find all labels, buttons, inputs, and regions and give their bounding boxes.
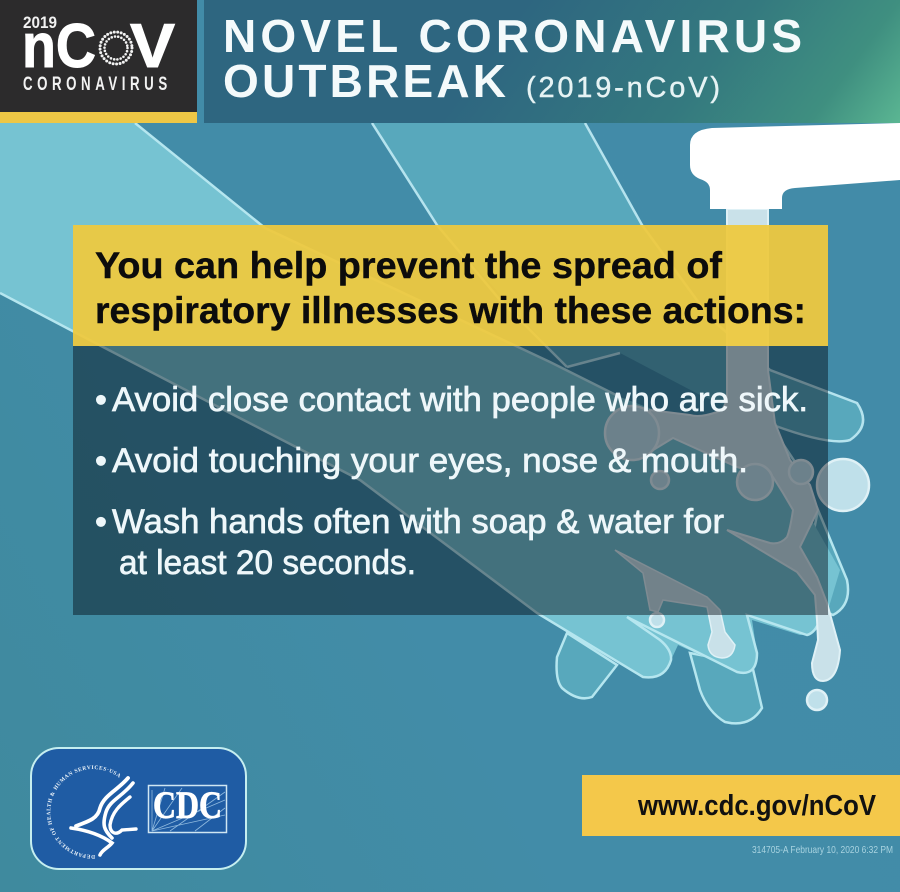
title line 2: OUTBREAK: [223, 55, 506, 107]
HHS and CDC logo badge: [30, 747, 247, 870]
logo V letter: V: [130, 12, 175, 81]
logo virus sphere: [100, 32, 132, 64]
website URL: www.cdc.gov/nCoV: [637, 790, 877, 822]
logo nC letters: nC: [22, 12, 96, 81]
HHS eagle: [71, 778, 136, 855]
finger: lower centre: [690, 653, 762, 723]
arm and lower hand: [0, 123, 840, 677]
faucet water stream and flow: [650, 209, 840, 681]
upper hand outline: [372, 123, 863, 465]
header title panel: [204, 0, 900, 123]
HHS seal text: DEPARTMENT OF HEALTH & HUMAN SERVICES·USA: [46, 765, 120, 859]
action: wash hands, second line: at least 20 seconds.: [119, 544, 416, 582]
water: lower runoff: [615, 550, 735, 658]
faucet: [690, 123, 900, 209]
action: avoid touching face: Avoid touching your eyes, nose & mouth.: [112, 442, 748, 480]
CDC letters: CDC: [153, 784, 222, 827]
CDC sun rays: [152, 788, 225, 831]
title line 1: NOVEL CORONAVIRUS: [223, 10, 802, 62]
arm outline: [0, 123, 820, 677]
action: avoid touching face: •: [95, 442, 107, 480]
soap bubbles: [605, 406, 869, 710]
heading line 2: respiratory illnesses with these actions:: [95, 290, 806, 331]
heading line 1: You can help prevent the spread of: [95, 245, 723, 286]
dark actions panel: [73, 346, 828, 615]
action: avoid close contact: •: [95, 381, 107, 419]
illustration: hands washing under faucet: [0, 123, 869, 723]
logo subtitle: CORONAVIRUS: [23, 74, 167, 95]
title abbreviation: (2019-nCoV): [526, 72, 720, 104]
yellow heading panel: [73, 225, 828, 346]
nCoV logo block: [0, 0, 197, 123]
CDC box: [148, 784, 226, 832]
finger: right: [800, 510, 848, 615]
action: avoid close contact: Avoid close contact with people who are sick.: [112, 381, 808, 419]
finger: lower left: [557, 633, 617, 698]
website bar: [582, 775, 900, 836]
action: wash hands: Wash hands often with soap & water for: [112, 503, 724, 541]
upper hand: medium teal stripe and finger: [372, 123, 863, 441]
action: wash hands: •: [95, 503, 107, 541]
logo year: 2019: [23, 13, 57, 32]
